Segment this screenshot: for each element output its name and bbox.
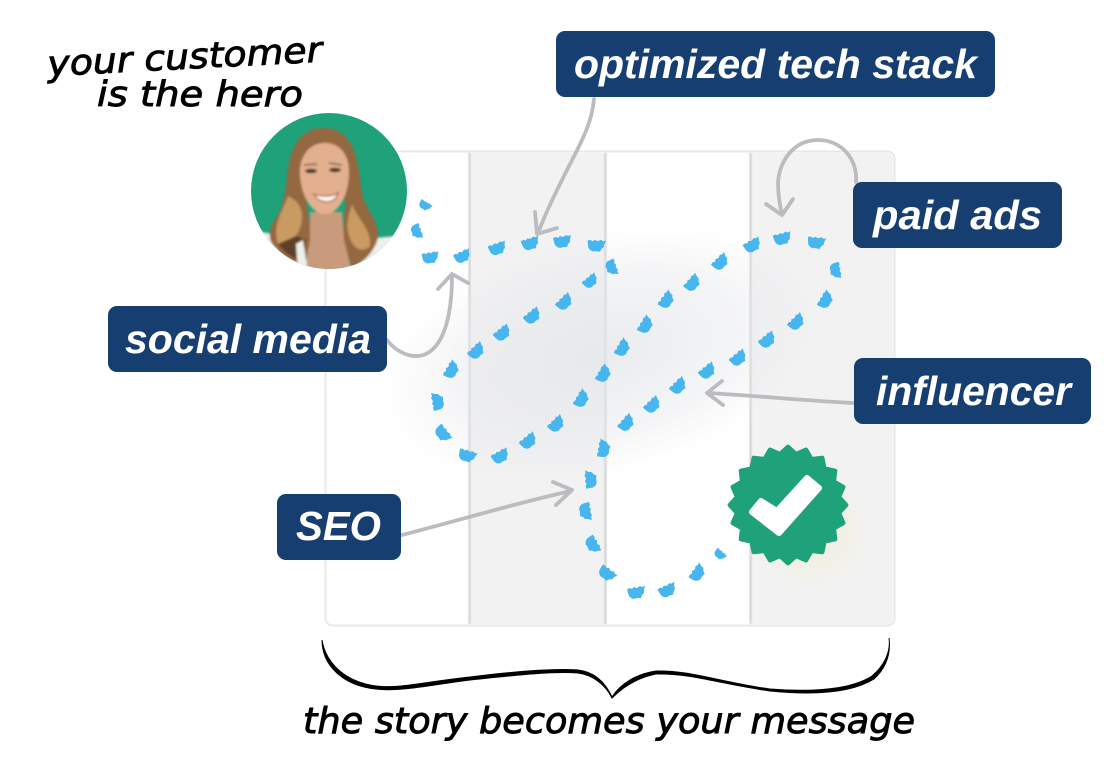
brace under columns — [322, 638, 889, 698]
photo: customer portrait — [250, 112, 408, 272]
eyes — [305, 169, 317, 173]
heading: your customer is the hero — [45, 31, 326, 115]
label: social media — [108, 306, 387, 372]
label: optimized tech stack: optimized tech stack — [574, 41, 979, 87]
arrow: social media to path — [387, 274, 468, 356]
yellow glow behind badge — [748, 468, 876, 596]
label: influencer — [854, 358, 1091, 424]
arrow: tech stack to path — [535, 99, 594, 234]
icon: verified check badge — [730, 447, 846, 563]
label: SEO: SEO — [296, 503, 381, 549]
label: optimized tech stack — [556, 31, 995, 97]
arrow: SEO to path — [402, 482, 572, 535]
label: influencer: influencer — [876, 368, 1073, 414]
background glow — [353, 184, 847, 526]
lapel — [296, 240, 308, 272]
label: paid ads: paid ads — [872, 192, 1042, 238]
heading: your customer is the hero: is the hero — [97, 75, 303, 115]
jacket — [262, 230, 394, 266]
label: SEO — [277, 494, 401, 560]
heading: your customer is the hero: your customer — [45, 31, 326, 85]
smile — [314, 193, 338, 202]
chest and neck — [304, 212, 352, 272]
label: paid ads — [853, 182, 1062, 248]
hair — [270, 128, 378, 268]
face — [300, 143, 349, 214]
caption: the story becomes your message: the story becomes your message — [303, 701, 915, 742]
label: social media: social media — [125, 316, 371, 362]
panel: four column story board — [326, 152, 894, 626]
arrow: influencer to path — [707, 381, 853, 405]
arrow: paid ads loop — [766, 140, 856, 215]
dotted customer journey path — [410, 198, 841, 599]
